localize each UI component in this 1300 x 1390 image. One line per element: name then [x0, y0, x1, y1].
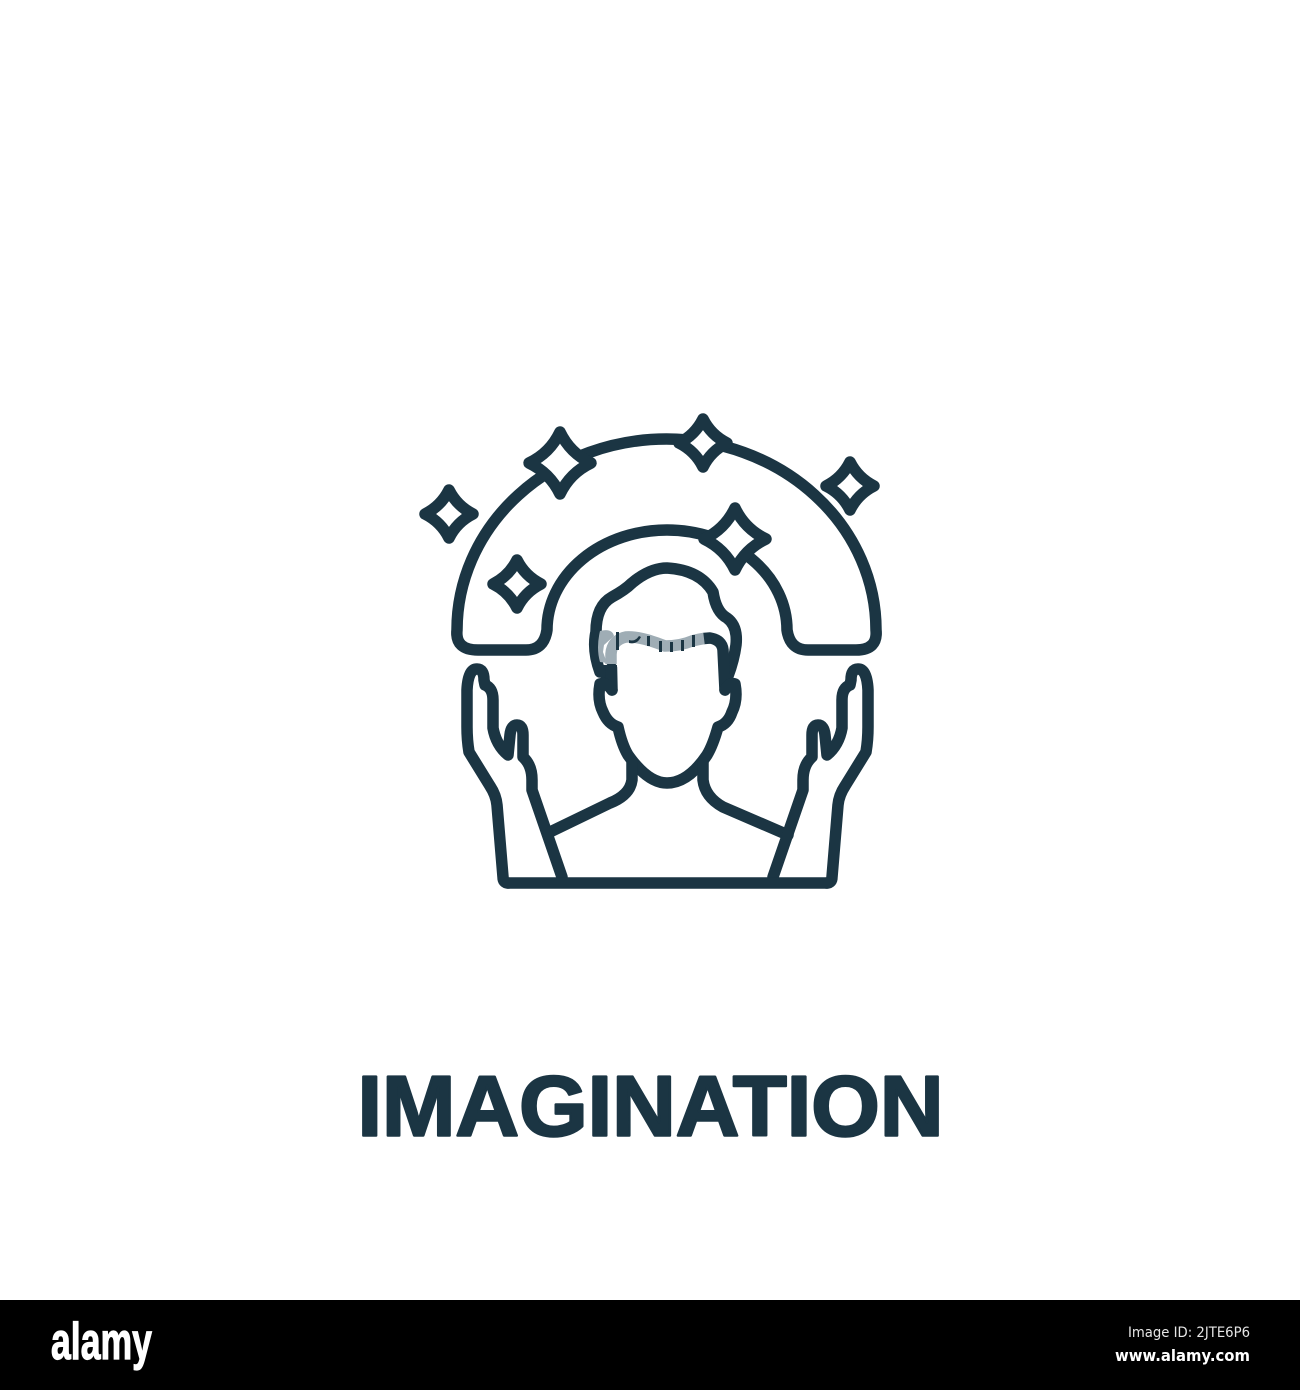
right raised hand	[773, 669, 868, 883]
alamy logo: alamy	[51, 1313, 152, 1371]
hairline right side	[704, 638, 725, 690]
neck and shoulders	[548, 763, 788, 835]
face	[599, 684, 736, 783]
website: www.alamy.com	[1115, 1346, 1250, 1365]
base line	[508, 877, 827, 889]
icon: sparkle far left	[425, 490, 473, 538]
icon: imagination person with arch and sparkles	[425, 419, 876, 883]
icon: sparkle inner left	[493, 560, 541, 608]
left raised hand	[467, 669, 562, 883]
icon: sparkle far right	[826, 462, 874, 510]
footer bar	[0, 1300, 1300, 1390]
icon: sparkle inner right	[704, 508, 766, 570]
hair fill at left temple	[597, 665, 617, 692]
image id: Image ID: 2JTE6P6	[1128, 1325, 1250, 1341]
icon: sparkle top	[679, 419, 727, 467]
icon: sparkle upper left	[529, 432, 591, 494]
hair	[595, 568, 736, 676]
title: IMAGINATION	[358, 1060, 944, 1154]
watermark trace on hairline	[598, 630, 704, 664]
arch	[457, 439, 876, 650]
hairline left stem	[606, 668, 618, 690]
